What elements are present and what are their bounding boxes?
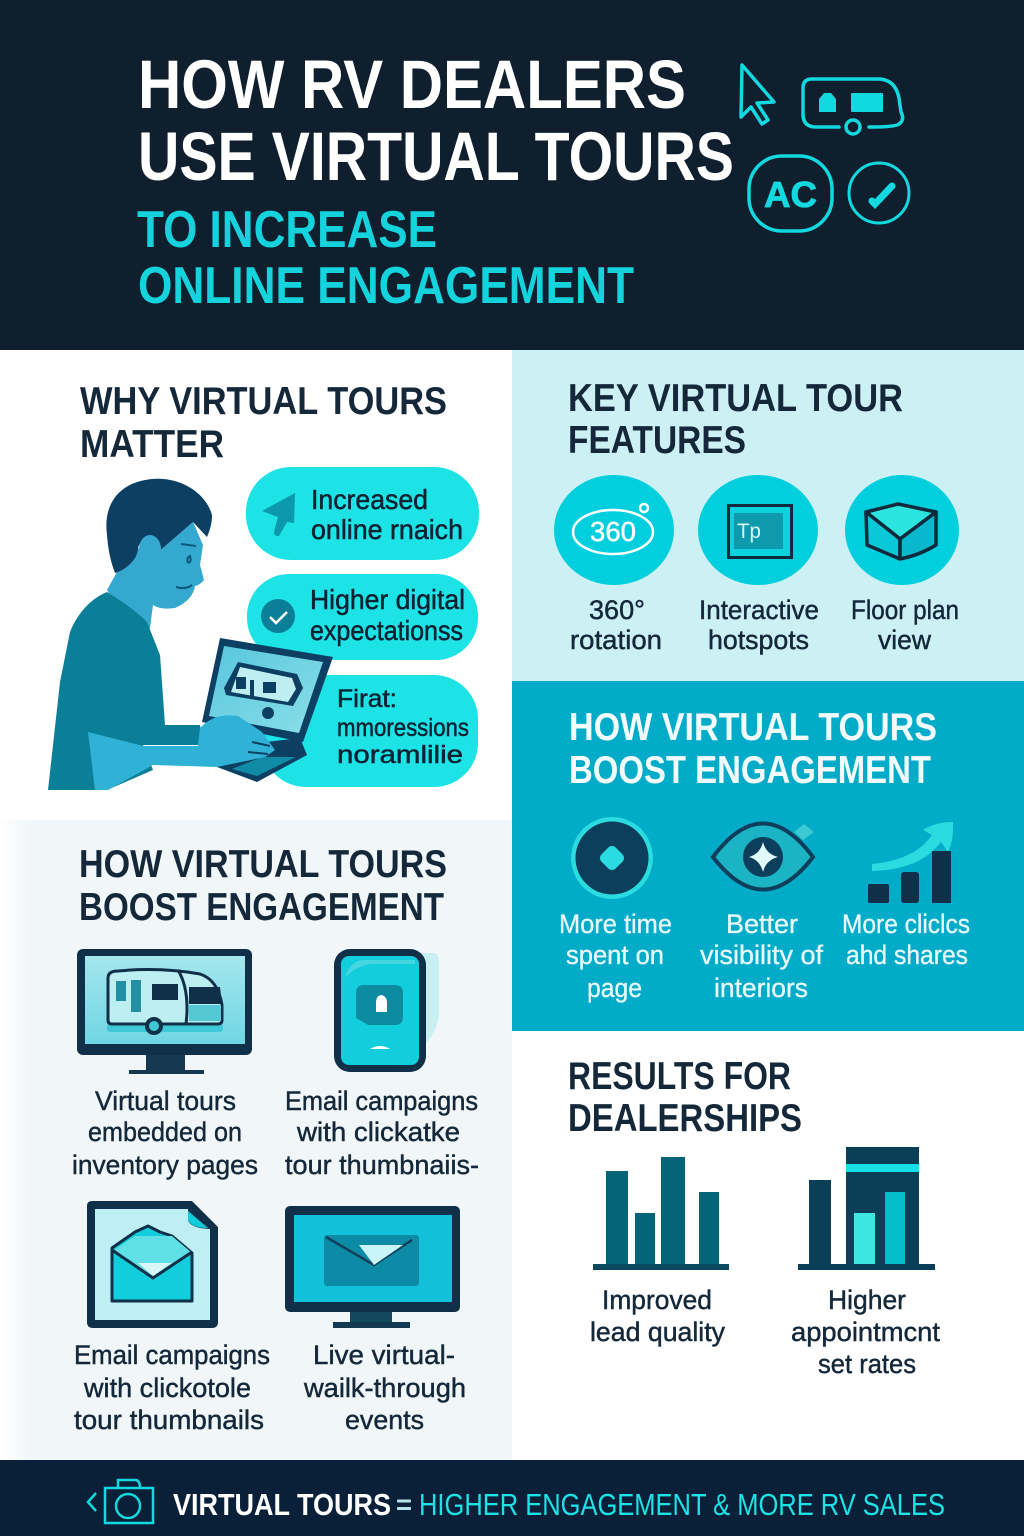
pill: first impressions: Firat: <box>337 685 397 713</box>
pill: higher digital expectations: expectationss <box>310 615 463 646</box>
item: more clicks and shares: ahd shares <box>846 940 968 970</box>
shirt <box>48 592 203 790</box>
item: virtual tours embedded <box>72 949 258 1180</box>
title: USE VIRTUAL TOURS <box>138 118 734 195</box>
icon: AC badge <box>749 156 832 231</box>
feature: floor plan view: Floor plan <box>851 595 959 625</box>
item: virtual tours embedded: inventory pages <box>72 1150 258 1180</box>
icon: camera <box>88 1480 153 1523</box>
item: email campaigns phone: tour thumbnaiis- <box>285 1150 479 1180</box>
item: more time spent on page: page <box>587 973 642 1003</box>
item: better visibility of interiors: visibility of <box>700 940 823 970</box>
heading: key virtual tour features: KEY VIRTUAL TOUR <box>568 377 903 420</box>
item: more time spent on page: spent on <box>566 940 664 970</box>
item: better visibility of interiors <box>700 824 823 1003</box>
panel: key features background <box>512 350 1024 681</box>
icon: AC badge: AC <box>764 174 817 215</box>
item: email campaigns phone <box>285 949 479 1180</box>
pill: first impressions: mmoressions <box>337 714 469 742</box>
feature: 360 rotation: rotation <box>570 625 662 655</box>
item: better visibility of interiors: interiors <box>714 973 808 1003</box>
item: more clicks and shares <box>842 822 970 970</box>
title: HOW RV DEALERS <box>138 46 686 123</box>
feature: 360 rotation <box>554 475 674 655</box>
heading: how virtual tours boost engagement (right) <box>569 706 937 792</box>
panel: boost engagement background <box>512 681 1024 1031</box>
icon: 360 <box>573 504 653 554</box>
pill: increased online reach <box>246 467 479 560</box>
icon: RV <box>803 79 903 134</box>
feature: interactive hotspots <box>698 475 819 655</box>
item: live virtual walk-through: events <box>345 1405 424 1435</box>
chart: higher appointment set rates: appointmcnt <box>791 1317 941 1347</box>
icon: phone <box>334 949 439 1072</box>
item: email campaigns document: with clickotole <box>83 1373 251 1403</box>
pill: higher digital expectations: Higher digital <box>310 584 465 615</box>
icon: hotspot frame <box>728 506 792 558</box>
item: email campaigns document <box>74 1201 270 1435</box>
icon: monitor with envelope <box>285 1206 460 1328</box>
neck and head <box>107 522 204 628</box>
chart: improved lead quality: Improved <box>602 1285 712 1315</box>
item: virtual tours embedded: embedded on <box>88 1117 242 1147</box>
pill: increased online reach: Increased <box>311 484 428 515</box>
hair <box>106 479 212 573</box>
ear <box>139 535 161 563</box>
eye and mouth <box>176 544 196 588</box>
heading: why virtual tours matter: MATTER <box>80 423 224 466</box>
item: live virtual walk-through: wailk-through <box>303 1373 466 1403</box>
title <box>137 46 734 315</box>
item: email campaigns document: tour thumbnails <box>74 1405 264 1435</box>
chart: higher appointment set rates: Higher <box>828 1285 906 1315</box>
pill: higher digital expectations <box>247 574 478 660</box>
icon: hotspot frame: Tp <box>737 520 761 543</box>
item: virtual tours embedded: Virtual tours <box>95 1086 236 1116</box>
laptop screen <box>202 638 333 742</box>
panel: header <box>0 0 1024 350</box>
pill: increased online reach: online rnaich <box>311 514 463 545</box>
laptop base <box>217 738 307 782</box>
icon: 360: 360 <box>590 516 636 547</box>
icon: monitor with RV <box>77 949 252 1074</box>
heading: key virtual tour features: FEATURES <box>568 419 746 462</box>
heading: how virtual tours boost engagement (left) <box>79 843 447 929</box>
feature: 360 rotation: 360° <box>589 595 645 625</box>
icon: cursor <box>741 65 774 124</box>
feature: floor plan view <box>845 475 959 655</box>
heading: why virtual tours matter: WHY VIRTUAL TOURS <box>80 380 447 423</box>
heading: results for dealerships: RESULTS FOR <box>568 1055 791 1098</box>
title: ONLINE ENGAGEMENT <box>138 257 634 315</box>
heading: how virtual tours boost engagement (left): HOW VIRTUAL TOURS <box>79 843 447 886</box>
pill: first impressions <box>262 675 478 787</box>
heading: how virtual tours boost engagement (right): BOOST ENGAGEMENT <box>569 749 931 792</box>
heading: results for dealerships: DEALERSHIPS <box>568 1097 802 1140</box>
chart: higher appointment set rates <box>791 1147 941 1379</box>
item: email campaigns phone: with clickatke <box>296 1117 460 1147</box>
heading: how virtual tours boost engagement (left): BOOST ENGAGEMENT <box>79 886 444 929</box>
footer text: = <box>396 1489 412 1520</box>
heading: why virtual tours matter <box>80 380 447 466</box>
chart: higher appointment set rates: set rates <box>818 1349 916 1379</box>
feature: interactive hotspots: Interactive <box>699 595 819 625</box>
item: better visibility of interiors: Better <box>726 909 798 939</box>
footer text: VIRTUAL TOURS <box>173 1487 391 1522</box>
laptop RV <box>224 662 303 719</box>
arm and hand <box>88 715 275 790</box>
item: email campaigns document: Email campaigns <box>74 1340 270 1370</box>
heading: how virtual tours boost engagement (right): HOW VIRTUAL TOURS <box>569 706 937 749</box>
item: more time spent on page <box>559 817 672 1003</box>
icon: check <box>261 599 295 633</box>
item: email campaigns phone: Email campaigns <box>285 1086 478 1116</box>
feature: interactive hotspots: hotspots <box>708 625 809 655</box>
item: more clicks and shares: More cliclcs <box>842 909 970 939</box>
icon: envelope document <box>87 1201 218 1328</box>
heading: results for dealerships <box>568 1055 802 1140</box>
title: TO INCREASE <box>137 201 437 259</box>
item: live virtual walk-through: Live virtual- <box>313 1340 455 1370</box>
icon: check circle <box>849 163 909 223</box>
feature: floor plan view: view <box>878 625 931 655</box>
illustration: person with laptop <box>48 479 333 790</box>
icon: box <box>866 504 936 559</box>
icon: arrow <box>262 493 295 536</box>
footer band <box>0 1460 1024 1536</box>
footer text <box>173 1487 945 1522</box>
chart: improved lead quality: lead quality <box>590 1317 725 1347</box>
heading: key virtual tour features <box>568 377 903 462</box>
item: more time spent on page: More time <box>559 909 672 939</box>
panel: left lower background <box>0 820 512 1460</box>
pill: first impressions: noramlilie <box>337 741 463 769</box>
item: live virtual walk-through <box>285 1206 466 1435</box>
chart: improved lead quality <box>590 1157 729 1347</box>
